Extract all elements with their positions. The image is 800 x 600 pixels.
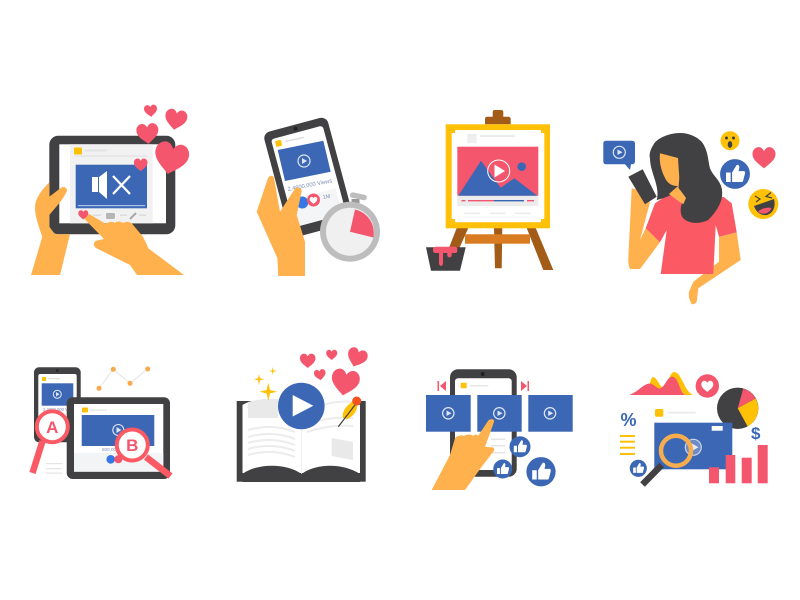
pointing hand [432, 419, 494, 490]
post header [275, 137, 304, 147]
hands [31, 182, 184, 275]
hearts [78, 104, 191, 220]
speech bubble with video [603, 141, 635, 170]
next arrow [521, 381, 529, 391]
panel: swipe carousel [426, 369, 573, 490]
panel: woman watching phone [603, 131, 778, 304]
hair [650, 133, 722, 223]
panel: A/B test [32, 366, 170, 479]
pie chart [717, 388, 758, 429]
video with mute icon [76, 165, 147, 208]
like badges [493, 436, 556, 486]
easel [445, 110, 553, 270]
phone in hand [628, 169, 657, 204]
like badge [720, 159, 750, 189]
video [278, 141, 331, 181]
dollar sign: $ [751, 424, 761, 443]
panel: tablet with muted video [31, 104, 191, 275]
book [237, 400, 366, 482]
magnifier [642, 436, 691, 484]
phone [450, 369, 517, 477]
phone [263, 116, 355, 239]
paint bucket [426, 247, 466, 271]
tablet [49, 136, 175, 234]
shirt [646, 194, 737, 274]
heart badge [696, 374, 719, 398]
emoji: wow [720, 131, 740, 150]
yellow list lines [620, 435, 635, 455]
stopwatch [320, 192, 380, 262]
play button [278, 383, 325, 429]
bar chart [709, 445, 768, 483]
canvas video [457, 147, 538, 206]
magnifier B: B [126, 436, 138, 455]
phone variant A: 2,4600,000 Views [43, 407, 76, 412]
left arm [628, 188, 660, 269]
views text: 2,4600,000 Views [287, 178, 333, 193]
quill [338, 396, 361, 427]
hand [257, 176, 305, 276]
area chart [629, 372, 693, 395]
video cards [426, 395, 573, 432]
panel: phone with stopwatch [257, 116, 380, 276]
right arm [689, 232, 741, 304]
video [654, 423, 732, 469]
sparkles [254, 367, 277, 401]
post header [655, 409, 696, 417]
post action icons [93, 213, 146, 219]
reaction icons [296, 194, 331, 208]
line chart [96, 366, 150, 391]
gray text lines [46, 463, 62, 474]
face and neck [660, 153, 686, 204]
panel: video analytics [620, 372, 768, 484]
emoji: laughing [748, 189, 778, 219]
percent sign: % [620, 410, 637, 430]
reaction icons: 1M [322, 194, 331, 201]
magnifier A: A [46, 418, 58, 437]
like badge [630, 460, 647, 477]
panel: easel with video canvas [426, 110, 553, 271]
heart [752, 147, 776, 168]
book text lines [248, 402, 353, 457]
book blocks [248, 399, 353, 460]
canvas frame [446, 124, 550, 228]
previous arrow [438, 381, 446, 391]
tablet variant B: 600,000 Views [102, 447, 133, 452]
hearts [300, 346, 369, 398]
panel: video story book [237, 346, 369, 482]
